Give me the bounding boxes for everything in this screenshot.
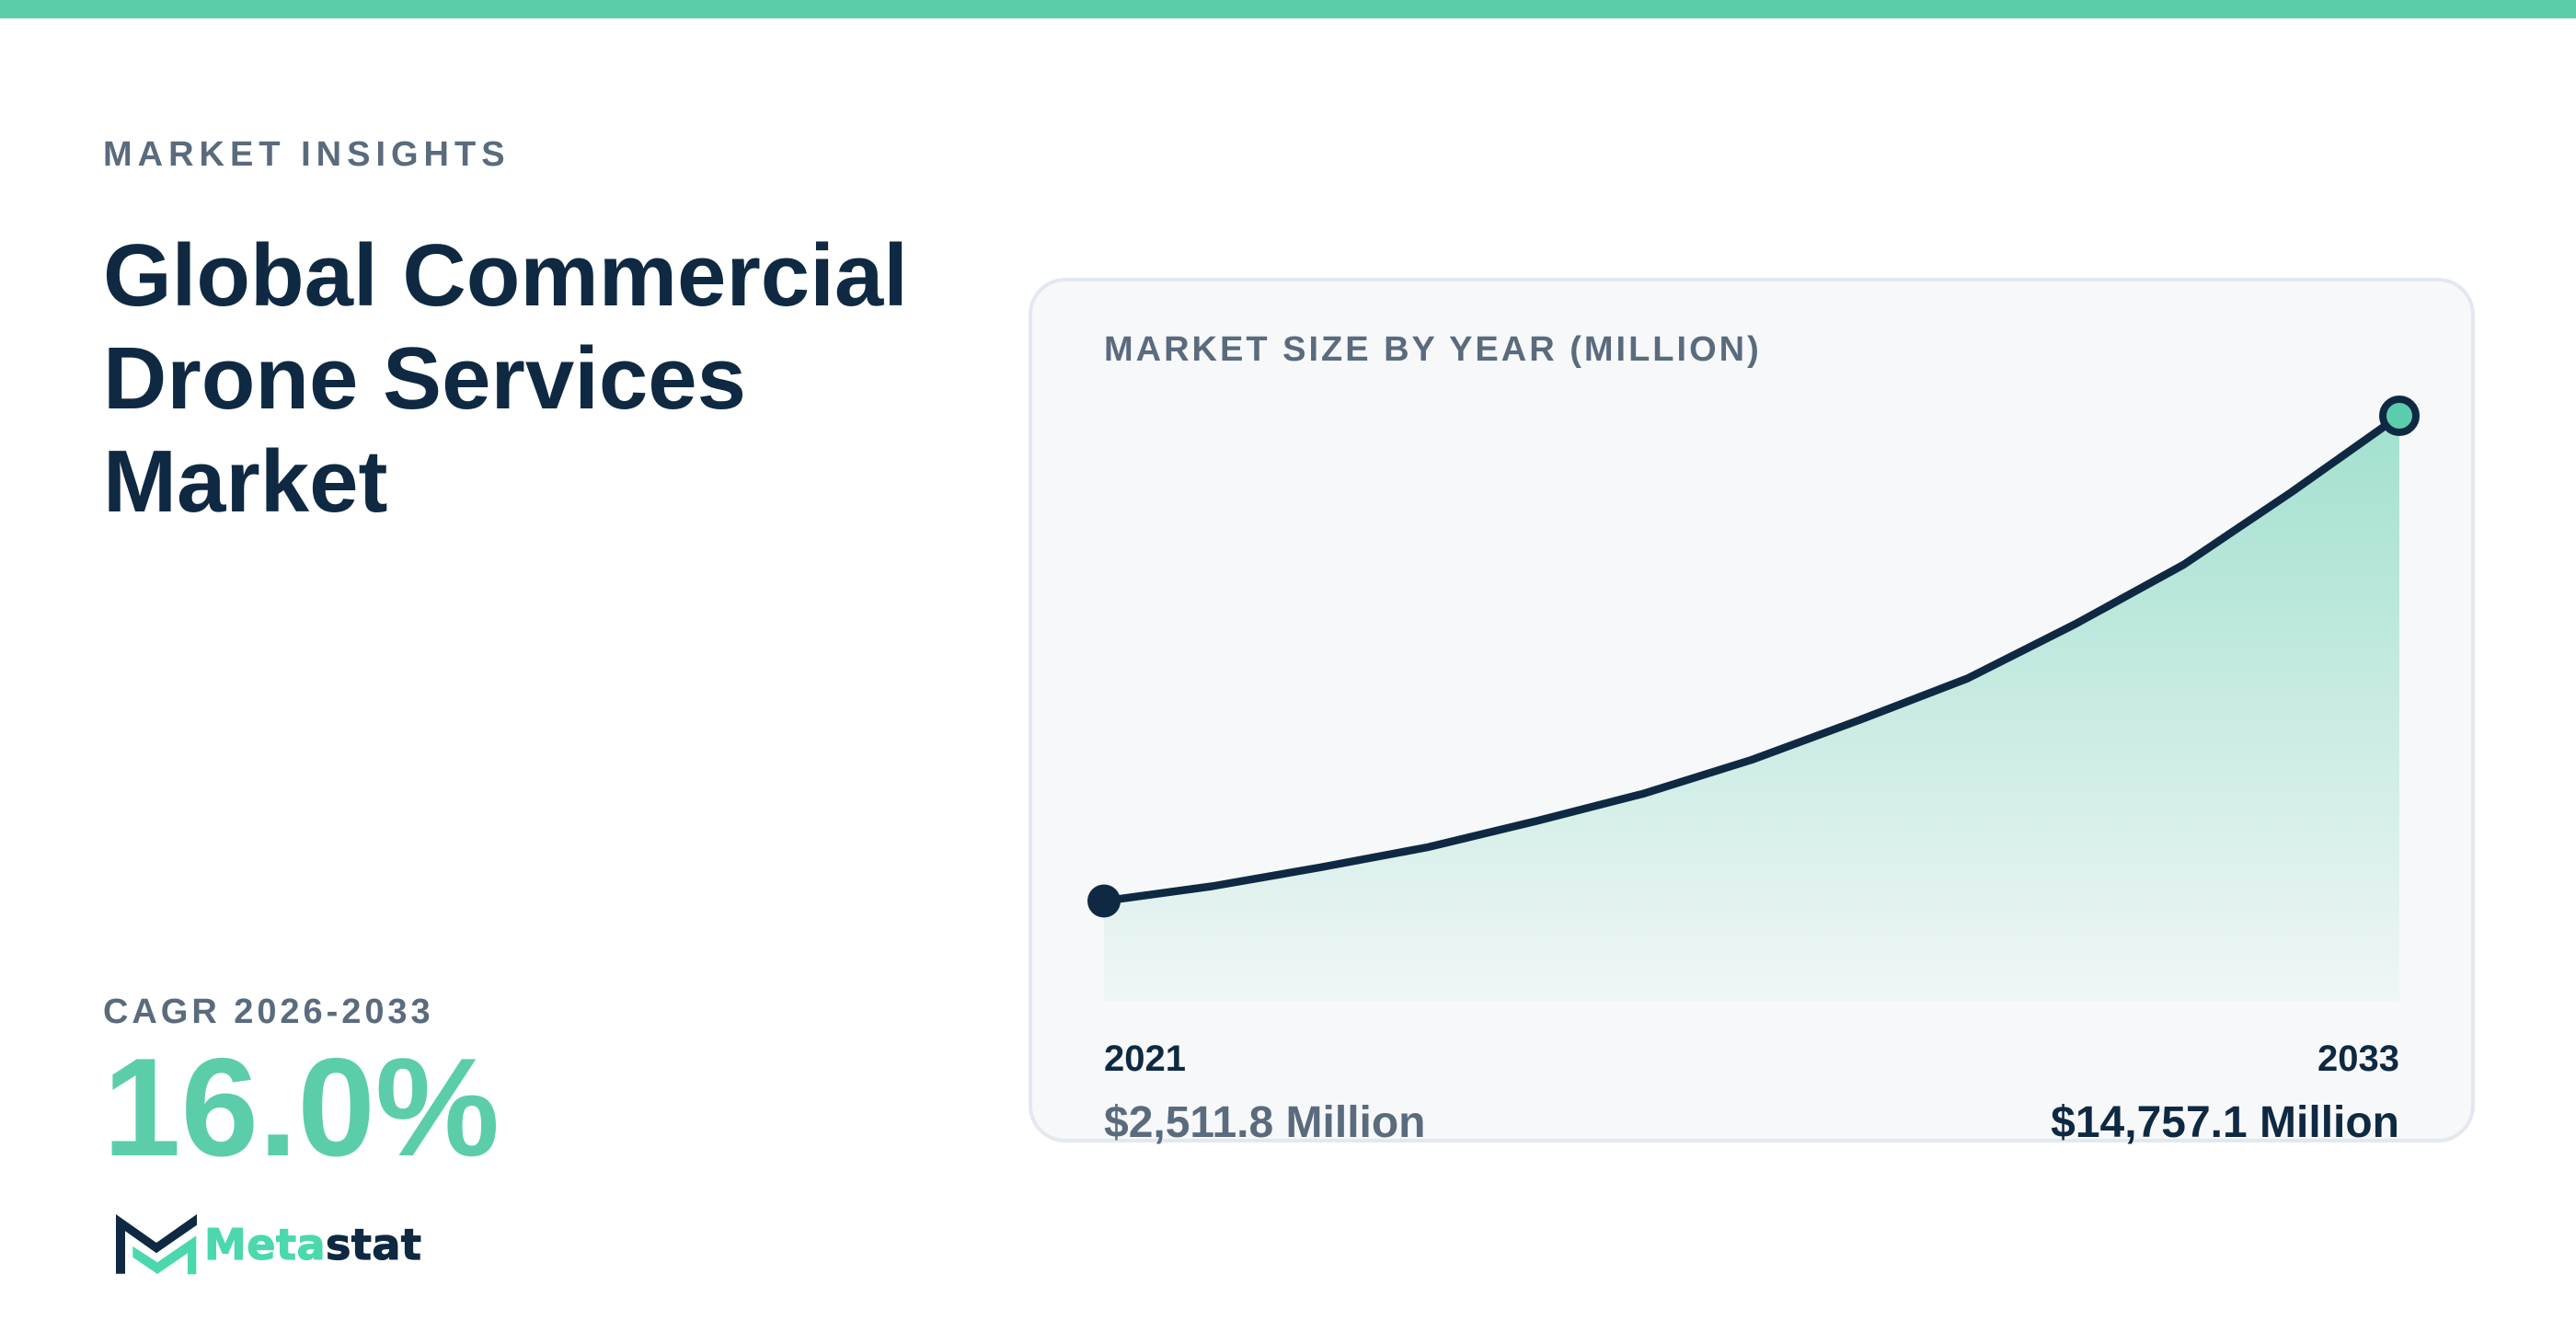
CAGR value: 16.0% <box>103 1029 500 1186</box>
start value: $2,511.8 Million <box>1104 1098 1426 1147</box>
end year label: 2033 <box>2317 1039 2399 1079</box>
chart heading: MARKET SIZE BY YEAR (MILLION) <box>1104 330 1762 369</box>
title: Drone Services <box>103 329 746 428</box>
title <box>103 226 908 531</box>
top accent bar <box>0 0 2576 18</box>
end point marker <box>2383 399 2416 432</box>
start point marker <box>1087 885 1121 918</box>
logo wordmark: Metastat <box>204 1220 421 1269</box>
trend line <box>1104 416 2399 901</box>
eyebrow label: MARKET INSIGHTS <box>103 135 511 174</box>
area fill <box>1104 416 2399 1001</box>
area line chart <box>1087 396 2420 999</box>
end value: $14,757.1 Million <box>2051 1098 2399 1147</box>
logo: Metastat <box>116 1214 421 1275</box>
icon: M mark <box>116 1214 197 1275</box>
CAGR label: CAGR 2026-2033 <box>103 993 434 1031</box>
title: Global Commercial <box>103 226 908 325</box>
panel: market size chart <box>1029 278 2475 1142</box>
title: Market <box>103 432 387 531</box>
start year label: 2021 <box>1104 1039 1186 1079</box>
